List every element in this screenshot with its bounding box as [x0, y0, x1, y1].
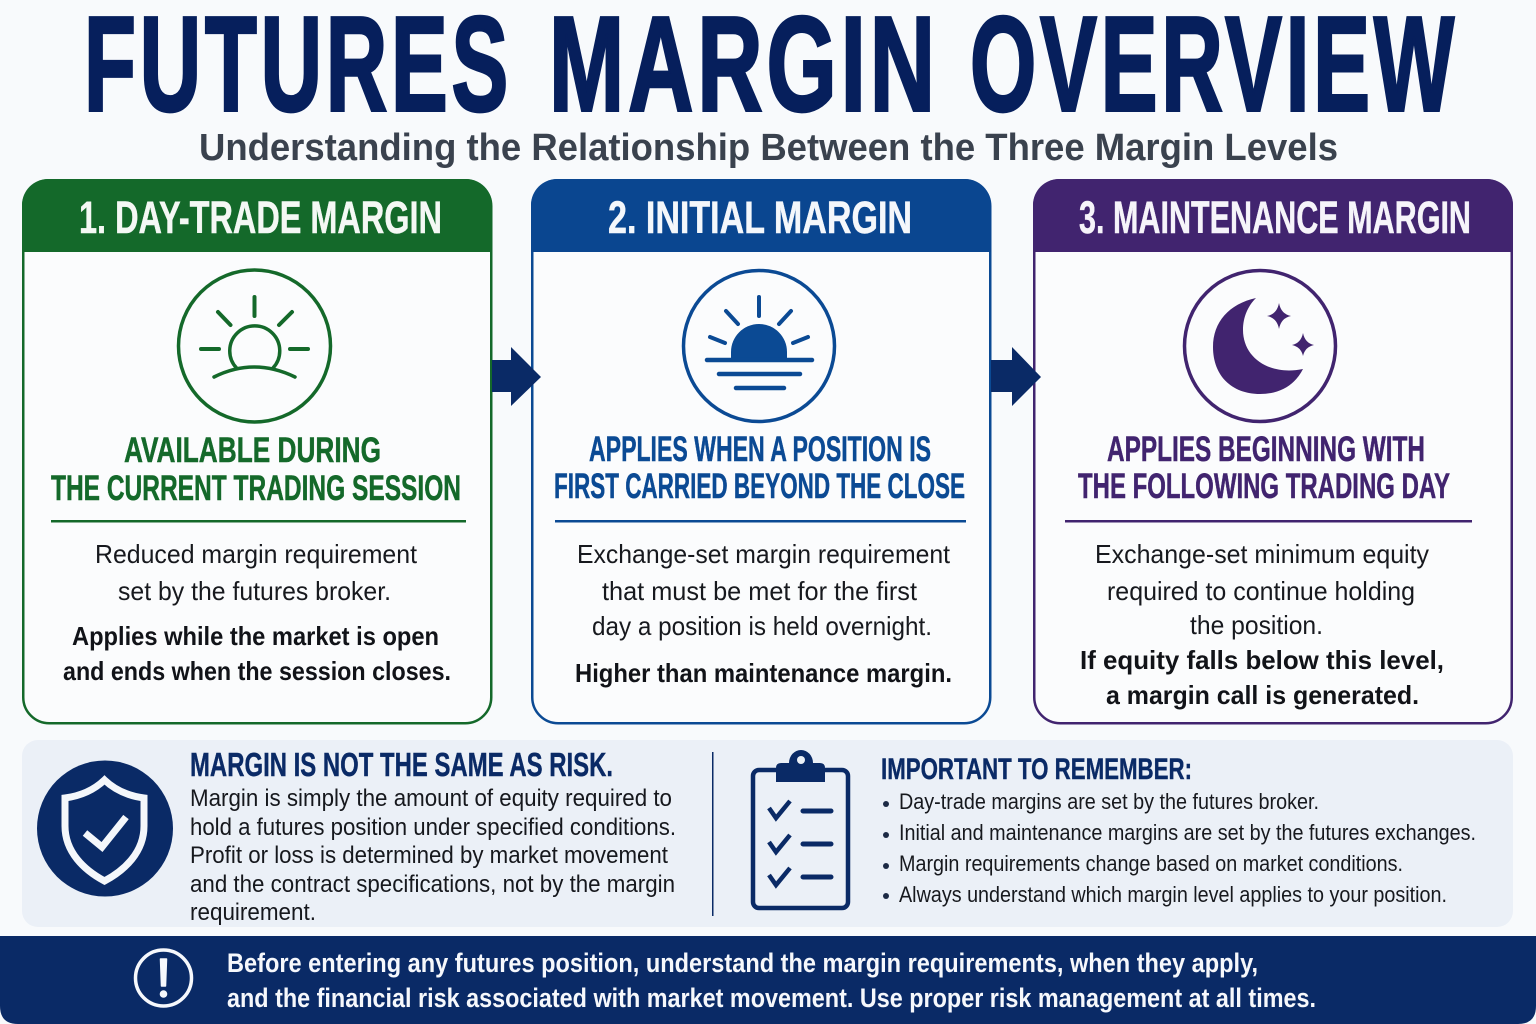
- text block: important to remember: Margin requirements change based on market conditions.: [899, 851, 1403, 876]
- icon: shield with check: [37, 760, 173, 896]
- description: day-trade margin: Reduced margin requirement: [95, 539, 418, 569]
- subheading: when it applies: [554, 430, 965, 506]
- description: maintenance margin: the position.: [1190, 610, 1323, 640]
- arrow: day-trade to initial: [492, 347, 541, 406]
- subheading: when it applies: APPLIES WHEN A POSITION IS: [589, 430, 931, 469]
- description: day-trade margin: set by the futures broker.: [118, 576, 391, 606]
- footer message: Before entering any futures position, understand the margin requirements, when they apply,: [227, 948, 1258, 978]
- text block: margin is not the same as risk: MARGIN IS NOT THE SAME AS RISK.: [190, 746, 613, 783]
- description: day-trade margin: and ends when the session closes.: [63, 656, 451, 686]
- footer message: [227, 948, 1316, 1013]
- text block: margin is not the same as risk: Profit or loss is determined by market movement: [190, 842, 668, 869]
- text block: margin is not the same as risk: and the contract specifications, not by the margin: [190, 871, 675, 898]
- text block: margin is not the same as risk: [190, 746, 676, 926]
- subheading: availability: [51, 431, 461, 508]
- description: day-trade margin: Applies while the market is open: [72, 621, 439, 651]
- panel: day-trade margin: [22, 179, 492, 723]
- header: day-trade margin: [22, 179, 492, 252]
- description: initial margin: that must be met for the first: [602, 576, 918, 606]
- subheading: when it begins: [1078, 430, 1450, 506]
- panel: maintenance margin: [1033, 179, 1513, 723]
- panel: initial margin: [531, 179, 991, 723]
- icon: crescent moon and stars: [1184, 270, 1336, 422]
- header: day-trade margin: 1. DAY-TRADE MARGIN: [79, 192, 442, 243]
- subheading: when it applies: FIRST CARRIED BEYOND THE CLOSE: [554, 467, 965, 506]
- description: maintenance margin: a margin call is generated.: [1106, 680, 1419, 710]
- text block: margin is not the same as risk: hold a futures position under specified conditions.: [190, 814, 676, 841]
- header: initial margin: [531, 179, 991, 252]
- text block: margin is not the same as risk: Margin is simply the amount of equity required to: [190, 785, 672, 812]
- text block: important to remember: IMPORTANT TO REMEMBER:: [881, 753, 1192, 786]
- panel: bottom information: [22, 740, 1513, 927]
- subheading: availability: THE CURRENT TRADING SESSION: [51, 469, 461, 508]
- icon: exclamation mark: [136, 950, 192, 1006]
- description: maintenance margin: If equity falls below this level,: [1080, 645, 1444, 675]
- arrow: initial to maintenance: [991, 347, 1041, 406]
- subheading: availability: AVAILABLE DURING: [124, 431, 381, 470]
- text block: margin is not the same as risk: requirement.: [190, 899, 316, 926]
- description: initial margin: Higher than maintenance margin.: [575, 658, 952, 688]
- icon: sun on horizon: [684, 270, 834, 422]
- subtitle: Understanding the Relationship Between the Three Margin Levels: [199, 127, 1338, 169]
- title: [84, 0, 1458, 140]
- text block: important to remember: [881, 753, 1476, 907]
- description: maintenance margin: required to continue holding: [1107, 576, 1415, 606]
- header: initial margin: 2. INITIAL MARGIN: [608, 192, 912, 243]
- header: maintenance margin: [1033, 179, 1513, 252]
- footer banner: [0, 936, 1536, 1024]
- description: initial margin: [575, 539, 952, 688]
- description: maintenance margin: Exchange-set minimum equity: [1095, 539, 1429, 569]
- text block: important to remember: Day-trade margins are set by the futures broker.: [899, 789, 1319, 814]
- description: initial margin: day a position is held overnight.: [592, 611, 932, 641]
- description: day-trade margin: [63, 539, 451, 686]
- text block: important to remember: Initial and maintenance margins are set by the futures exchanges.: [899, 820, 1476, 845]
- text block: important to remember: Always understand which margin level applies to your position.: [899, 882, 1447, 907]
- description: maintenance margin: [1080, 539, 1444, 710]
- icon: clipboard checklist: [753, 750, 848, 908]
- footer message: and the financial risk associated with market movement. Use proper risk management at all times.: [227, 983, 1316, 1013]
- description: initial margin: Exchange-set margin requirement: [577, 539, 951, 569]
- icon: rising sun outline: [178, 270, 330, 422]
